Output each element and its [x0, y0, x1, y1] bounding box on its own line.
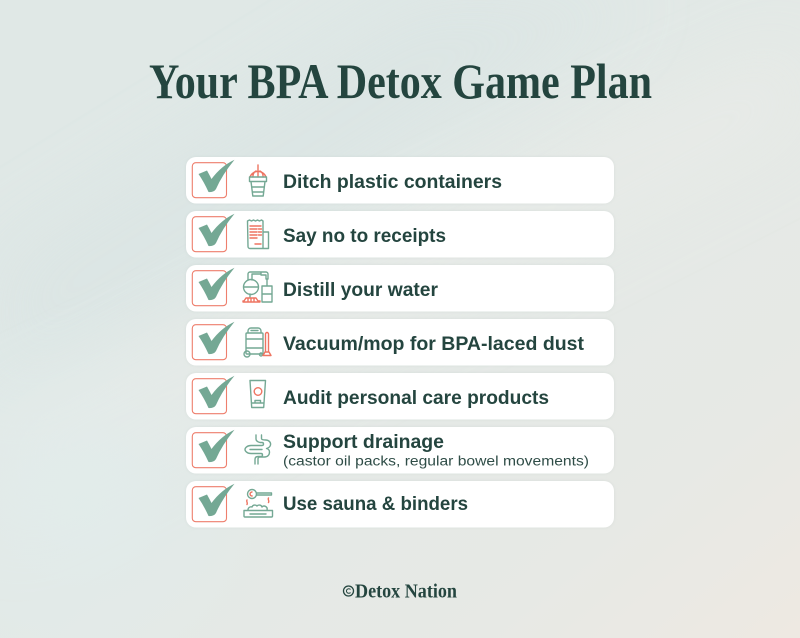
checklist row: support drainage: Support drainage — [283, 432, 444, 453]
checklist row: ditch plastic containers — [186, 157, 614, 204]
icon: vacuum and mop — [244, 328, 271, 357]
checklist row: support drainage — [186, 427, 614, 474]
checklist row: vacuum and mop — [186, 319, 614, 366]
icon: plastic cup — [250, 165, 266, 196]
icon: lotion tube — [250, 380, 266, 408]
checklist row: audit personal care products — [186, 373, 614, 420]
icon: sauna ladle and stones — [244, 490, 272, 517]
title: Your BPA Detox Game Plan — [149, 55, 652, 109]
checklist row: support drainage: (castor oil packs, regular bowel movements) — [283, 454, 589, 468]
icon: water distiller — [243, 272, 272, 302]
checklist row: ditch plastic containers: Ditch plastic containers — [283, 172, 502, 193]
icon: intestines — [245, 435, 271, 464]
icon: receipt — [248, 220, 268, 248]
checklist row: distill your water: Distill your water — [283, 280, 439, 301]
checklist row: use sauna and binders — [186, 481, 614, 528]
checklist row: vacuum and mop: Vacuum/mop for BPA-laced dust — [283, 334, 585, 355]
checklist row: audit personal care products: Audit personal care products — [283, 388, 549, 409]
checklist row: distill your water — [186, 265, 614, 312]
footer logo: Detox Nation: Detox Nation — [355, 580, 457, 602]
checklist row: say no to receipts: Say no to receipts — [283, 226, 446, 247]
checklist row: say no to receipts — [186, 211, 614, 258]
checklist row: use sauna and binders: Use sauna & binders — [283, 494, 468, 515]
